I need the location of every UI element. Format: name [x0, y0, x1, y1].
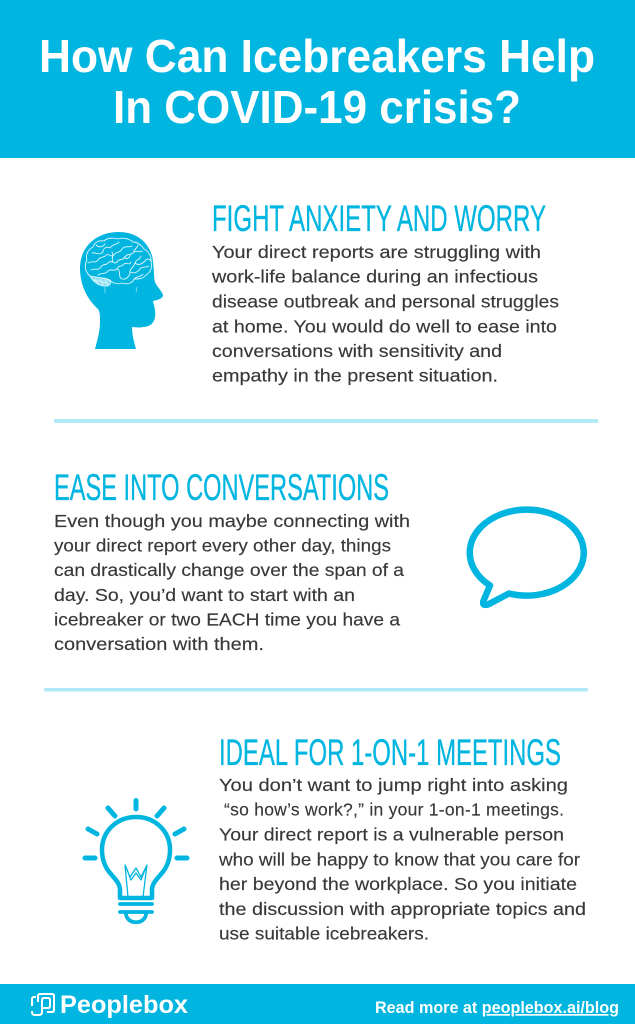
body text: use suitable icebreakers. — [219, 924, 429, 944]
body text: at home. You would do well to ease into — [212, 316, 557, 336]
icon: head with brain — [80, 232, 163, 349]
header banner — [0, 0, 635, 158]
body text: the discussion with appropriate topics and — [219, 899, 586, 919]
bulb glass — [102, 817, 170, 898]
body text: “so how’s work?,” in your 1-on-1 meetings. — [224, 800, 564, 820]
icon: light bulb — [85, 800, 187, 922]
title: How Can Icebreakers Help — [39, 30, 595, 82]
body text: Your direct reports are struggling with — [212, 242, 541, 262]
body text: day. So, you’d want to start with an — [54, 585, 355, 605]
body text: conversations with sensitivity and — [212, 341, 502, 361]
brain outline — [85, 238, 152, 284]
body text: empathy in the present situation. — [212, 366, 498, 386]
heading: EASE INTO CONVERSATIONS — [54, 466, 389, 508]
logo mark — [32, 994, 54, 1015]
body text — [211, 242, 559, 386]
logo wordmark: Peoplebox — [60, 991, 188, 1019]
body text: Your direct report is a vulnerable person — [219, 824, 564, 844]
title: In COVID-19 crisis? — [113, 81, 521, 133]
body text: Even though you maybe connecting with — [54, 511, 410, 531]
icon: speech bubble — [470, 510, 584, 605]
body text: can drastically change over the span of a — [54, 560, 404, 580]
body text: disease outbreak and personal struggles — [212, 292, 559, 312]
body text: your direct report every other day, things — [54, 536, 391, 556]
body text: conversation with them. — [54, 634, 264, 654]
body text: her beyond the workplace. So you initiate — [219, 874, 577, 894]
footer bar — [0, 984, 635, 1024]
filament — [125, 865, 147, 897]
title — [39, 30, 595, 133]
section: ease into conversations — [54, 466, 410, 654]
cerebellum — [90, 276, 111, 286]
base — [120, 904, 152, 922]
read more link: Read more at peoplebox.ai/blog — [375, 998, 619, 1017]
body text: work-life balance during an infectious — [211, 266, 538, 286]
section: fight anxiety — [211, 197, 559, 386]
lower brain marks — [105, 287, 137, 293]
body text: icebreaker or two EACH time you have a — [54, 610, 400, 630]
body text — [218, 775, 586, 944]
section: ideal for 1-on-1 meetings — [218, 731, 586, 944]
body text: You don’t want to jump right into asking — [219, 775, 568, 795]
body text: who will be happy to know that you care for — [218, 850, 580, 870]
body text — [54, 511, 410, 654]
rays — [85, 800, 187, 858]
